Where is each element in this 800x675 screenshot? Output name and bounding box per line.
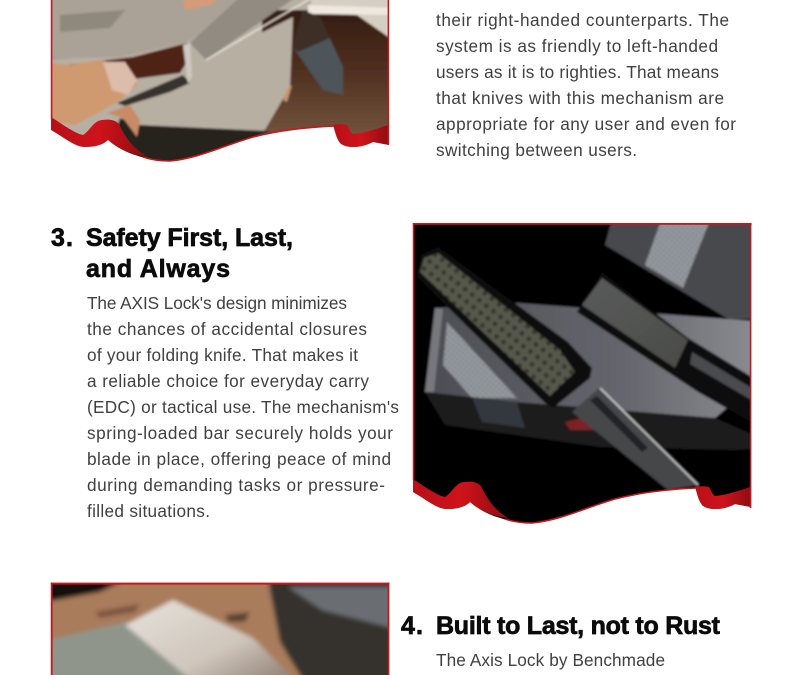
- text block: safety paragraph: of your folding knife. That makes it: [87, 345, 358, 365]
- text block: safety paragraph: a reliable choice for everyday carry: [87, 371, 369, 391]
- heading: section 3: and Always: [86, 255, 230, 283]
- text block: safety paragraph: during demanding tasks or pressure-: [87, 475, 385, 495]
- text block: rust paragraph: The Axis Lock by Benchmade: [436, 650, 665, 670]
- heading: section 3: Safety First, Last,: [86, 224, 293, 252]
- text block: ambidextrous paragraph: that knives with this mechanism are: [436, 88, 724, 108]
- text block: ambidextrous paragraph: appropriate for any user and even for: [436, 114, 736, 134]
- heading: section 4: 4.: [401, 612, 423, 640]
- text block: safety paragraph: filled situations.: [87, 501, 210, 521]
- heading: section 4: Built to Last, not to Rust: [436, 612, 721, 640]
- text block: safety paragraph: the chances of accidental closures: [87, 319, 367, 339]
- text block: safety paragraph: (EDC) or tactical use. The mechanism's: [87, 397, 399, 417]
- panel: knife cleaning photo: [50, 0, 390, 162]
- text block: ambidextrous paragraph: switching between users.: [436, 140, 637, 160]
- text block: ambidextrous paragraph: system is as friendly to left-handed: [436, 36, 718, 56]
- text block: safety paragraph: blade in place, offering peace of mind: [87, 449, 391, 469]
- text block: safety paragraph: [87, 293, 399, 521]
- heading: section 3: [51, 224, 293, 283]
- heading: section 3: 3.: [51, 224, 73, 252]
- text block: ambidextrous paragraph: their right-handed counterparts. The: [436, 10, 729, 30]
- text block: ambidextrous paragraph: [436, 10, 736, 160]
- panel: whetstone photo: [50, 582, 390, 675]
- panel: carbon fibre knives photo: [412, 223, 752, 524]
- text block: safety paragraph: spring-loaded bar securely holds your: [87, 423, 393, 443]
- text block: safety paragraph: The AXIS Lock's design minimizes: [87, 293, 347, 313]
- text block: ambidextrous paragraph: users as it is to righties. That means: [436, 62, 719, 82]
